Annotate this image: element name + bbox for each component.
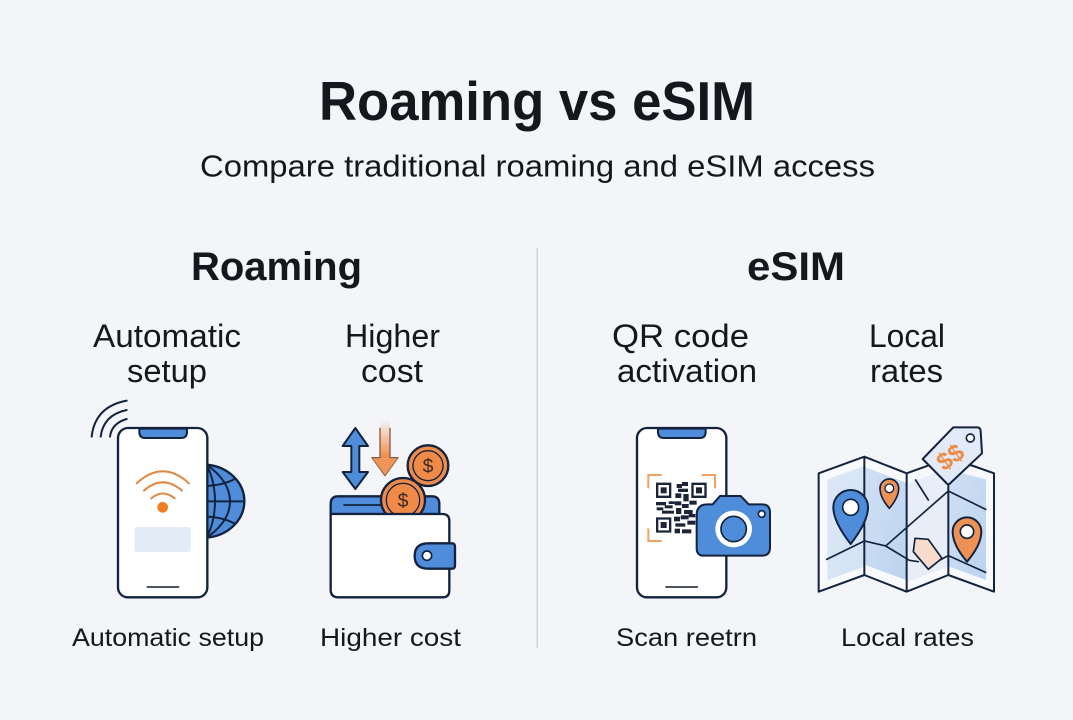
price tag dollar signs: $$ — [932, 439, 970, 477]
icon: phone body — [118, 428, 207, 597]
icon: phone with wifi and globe — [92, 401, 250, 597]
icon: phone notch — [658, 429, 706, 438]
caption: automatic setup: Automatic setup — [72, 624, 264, 652]
label: higher cost heading second line: cost — [361, 353, 423, 389]
label: activation heading: activation — [617, 353, 757, 389]
icon: down arrow — [372, 420, 398, 476]
icon: back coin: $ — [423, 456, 434, 477]
icon: signal arcs — [92, 401, 127, 437]
caption: local rates: Local rates — [841, 624, 974, 652]
label: automatic setup heading: Automatic — [93, 318, 241, 354]
icon: front coin: $ — [398, 491, 409, 512]
icon: back coin — [408, 445, 448, 486]
map roads — [827, 480, 986, 572]
panel: roaming — [72, 245, 461, 652]
icon: phone body — [637, 428, 726, 597]
heading: esim: eSIM — [747, 245, 845, 289]
icon: wallet clasp — [415, 543, 455, 569]
icon: wallet body — [331, 514, 449, 597]
icon: qr code — [656, 482, 707, 533]
icon: phone with qr code and camera — [637, 428, 770, 597]
label: qr code heading: QR code — [612, 318, 749, 354]
icon: double arrow — [343, 428, 368, 489]
icon: small orange pin — [880, 479, 899, 508]
icon: camera — [697, 496, 770, 556]
panel: esim — [612, 245, 994, 652]
icon: wallet with coins and arrows — [331, 420, 455, 597]
subtitle: Compare traditional roaming and eSIM access — [200, 148, 875, 184]
icon: globe — [208, 464, 246, 539]
icon: large orange pin — [953, 517, 981, 562]
icon: wifi — [137, 471, 189, 513]
label: automatic setup heading second line: setup — [127, 353, 207, 389]
title: Roaming vs eSIM — [319, 70, 755, 132]
icon: folded map with pins and price tag — [819, 427, 994, 592]
label: local rates heading: Local — [869, 318, 945, 354]
label: higher cost heading: Higher — [345, 318, 440, 354]
map base — [819, 457, 994, 592]
map tint panels — [827, 466, 986, 582]
icon: front coin — [381, 478, 425, 522]
caption: scan return: Scan reetrn — [616, 624, 757, 652]
icon: scan corners — [648, 475, 715, 541]
caption: higher cost: Higher cost — [320, 624, 461, 652]
map outline — [819, 457, 994, 592]
icon: small peach tag — [913, 538, 942, 569]
icon: price tag — [923, 427, 982, 485]
phone placeholder bar — [135, 527, 191, 552]
icon: phone notch — [139, 429, 187, 438]
icon: wallet flap — [331, 496, 439, 514]
icon: large blue pin — [833, 490, 868, 544]
heading: roaming: Roaming — [191, 245, 362, 289]
label: local rates heading second line: rates — [870, 353, 943, 389]
